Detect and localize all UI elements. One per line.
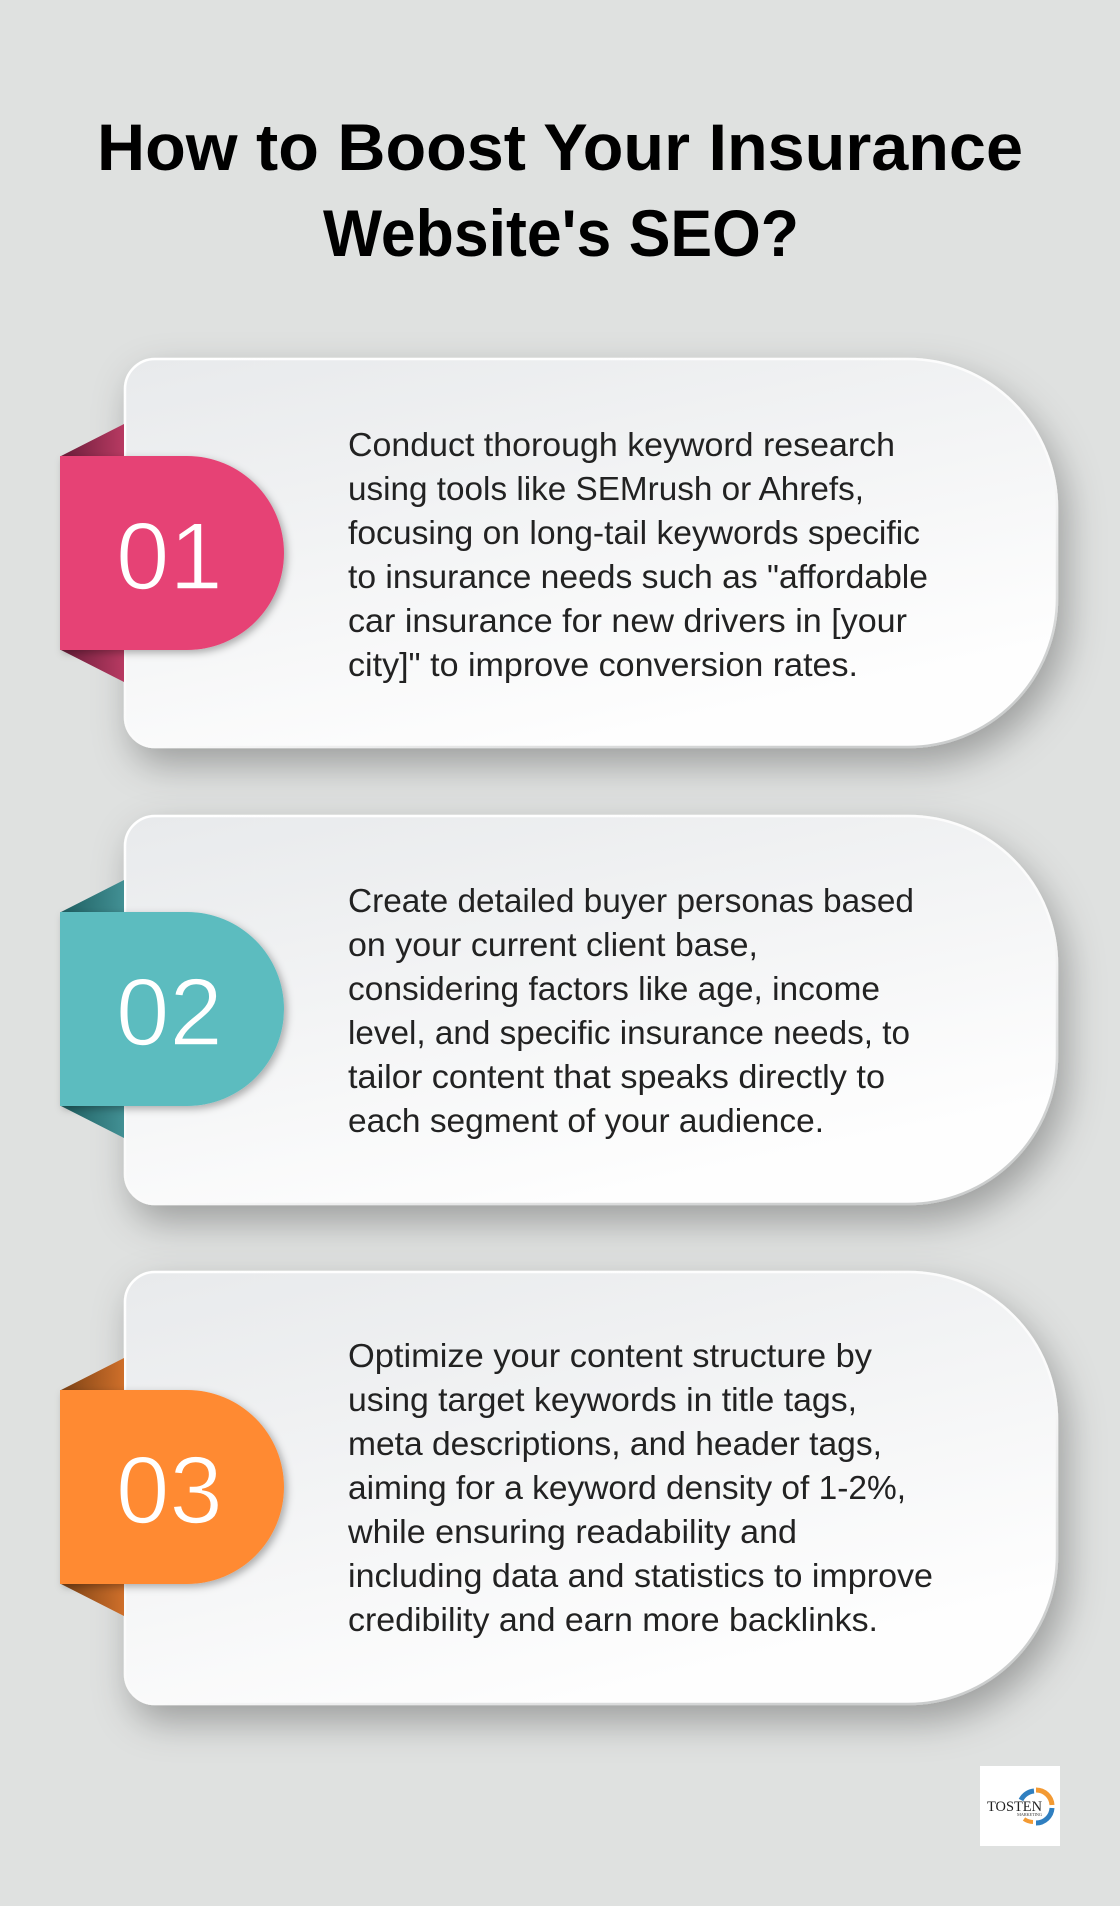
card background 01 bbox=[125, 359, 1057, 747]
title bbox=[97, 110, 1023, 270]
title: How to Boost Your Insurance bbox=[97, 110, 1023, 184]
number badge 02: 02 bbox=[116, 959, 223, 1066]
card background 02 bbox=[125, 816, 1057, 1204]
text block 01: using tools like SEMrush or Ahrefs, bbox=[348, 471, 864, 508]
ribbon fold bottom 01 bbox=[61, 650, 124, 682]
text block 03: meta descriptions, and header tags, bbox=[348, 1426, 882, 1463]
panel: step 02 bbox=[60, 816, 1057, 1204]
text block 01: car insurance for new drivers in [your bbox=[348, 603, 907, 640]
ribbon fold bottom 02 bbox=[61, 1106, 124, 1138]
panel: step 03 bbox=[60, 1272, 1057, 1704]
number badge 01: 01 bbox=[116, 503, 223, 610]
text block 01 bbox=[348, 427, 928, 684]
text block 02: each segment of your audience. bbox=[348, 1103, 824, 1140]
ribbon fold top 02 bbox=[61, 880, 124, 912]
text block 01: Conduct thorough keyword research bbox=[348, 427, 895, 464]
ribbon fold bottom 03 bbox=[61, 1584, 124, 1616]
logo: Tosten Marketing: TOSTEN bbox=[987, 1799, 1042, 1815]
text block 03: credibility and earn more backlinks. bbox=[348, 1602, 878, 1639]
text block 03: including data and statistics to improve bbox=[348, 1558, 933, 1595]
title: Website's SEO? bbox=[323, 196, 799, 270]
text block 02 bbox=[348, 883, 914, 1140]
text block 01: focusing on long-tail keywords specific bbox=[348, 515, 920, 552]
number badge 01 bbox=[60, 456, 284, 650]
ribbon fold top 03 bbox=[61, 1358, 124, 1390]
text block 01: city]" to improve conversion rates. bbox=[348, 647, 858, 684]
text block 03: Optimize your content structure by bbox=[348, 1338, 872, 1375]
text block 01: to insurance needs such as "affordable bbox=[348, 559, 928, 596]
number badge 02 bbox=[60, 912, 284, 1106]
logo: Tosten Marketing bbox=[980, 1766, 1060, 1846]
ribbon fold top 01 bbox=[61, 424, 124, 456]
number badge 03 bbox=[60, 1390, 284, 1584]
text block 03 bbox=[347, 1338, 933, 1639]
text block 03: using target keywords in title tags, bbox=[348, 1382, 857, 1419]
card background 03 bbox=[125, 1272, 1057, 1704]
text block 02: considering factors like age, income bbox=[348, 971, 880, 1008]
text block 03: while ensuring readability and bbox=[347, 1514, 797, 1551]
logo: Tosten Marketing: MARKETING bbox=[1017, 1812, 1043, 1817]
text block 03: aiming for a keyword density of 1-2%, bbox=[348, 1470, 906, 1507]
text block 02: on your current client base, bbox=[348, 927, 758, 964]
number badge 03: 03 bbox=[116, 1437, 223, 1544]
text block 02: tailor content that speaks directly to bbox=[348, 1059, 885, 1096]
panel: step 01 bbox=[60, 359, 1057, 747]
text block 02: level, and specific insurance needs, to bbox=[348, 1015, 910, 1052]
text block 02: Create detailed buyer personas based bbox=[348, 883, 914, 920]
